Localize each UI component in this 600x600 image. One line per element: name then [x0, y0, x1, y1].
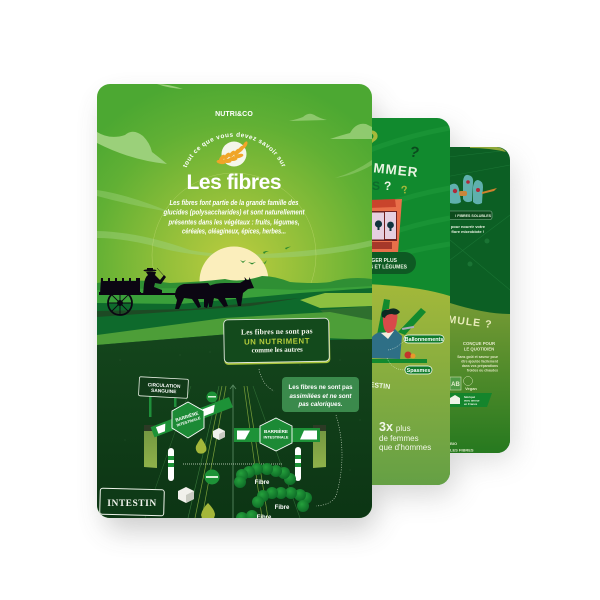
text: conçue pour le quotidien: CONÇUE POUR	[463, 341, 496, 346]
labels: fibre	[255, 480, 290, 521]
label: fibres solubles	[445, 211, 492, 220]
intro text: présentes dans les végétaux : fruits, légumes,	[168, 220, 300, 226]
back card: la formule	[450, 147, 510, 453]
front card: les fibres	[97, 84, 372, 518]
logo: bio: AB	[451, 382, 460, 388]
silhouette: ox cart and farmer	[99, 268, 254, 315]
icon: question marks: ?	[361, 125, 379, 158]
text: microbiote	[451, 226, 485, 233]
logo: bio	[450, 377, 461, 390]
sun	[200, 246, 268, 282]
heading: fibres	[372, 182, 391, 190]
barrier: open left: BARRIÈRE	[174, 409, 199, 423]
landscape fields	[97, 276, 372, 345]
text: conçue pour le quotidien: LE QUOTIDIEN	[464, 346, 494, 352]
illustration: man with bloating	[372, 299, 427, 363]
icon: sugar cube bottom	[178, 487, 194, 503]
text: footer	[450, 442, 474, 452]
heading: formule: ORMULE ?	[429, 311, 493, 331]
callout: not assimilated	[282, 377, 359, 412]
icon: wheat	[216, 141, 249, 166]
label: spasmes: Spasmes	[407, 368, 430, 374]
icon: question marks: ?	[408, 143, 421, 162]
text: microbiote: flore microbiote !	[451, 229, 484, 234]
sign: circulation sanguine: CIRCULATION	[148, 382, 181, 390]
callout connector	[259, 369, 342, 506]
pill: manger plus de fruits et légumes	[372, 252, 416, 274]
barrier: open left	[151, 397, 233, 438]
icon: lime drop top	[196, 438, 206, 454]
gate pillars	[144, 425, 326, 468]
text: microbiote: pour nourrir votre	[451, 224, 486, 229]
badge: fabriqué en France: en France	[464, 402, 478, 406]
stat: 3x plus de femmes: 3x plus	[379, 420, 411, 434]
dark ground	[97, 334, 372, 518]
card drop shadows	[105, 100, 513, 530]
callout: not a nutrient: UN NUTRIMENT	[244, 336, 310, 347]
text: footer: LES FIBRES	[450, 448, 474, 452]
logo: vegan: Vegan	[465, 386, 477, 391]
icon: glucose ball middle	[204, 470, 220, 484]
pill: manger plus de fruits et légumes: DE FRUITS ET LÉGUMES	[347, 262, 408, 270]
callout: not a nutrient: Les fibres ne sont pas	[241, 326, 313, 337]
barrier: closed right: BARRIÈRE	[264, 427, 288, 434]
heading: consommer: CONSOMMER	[318, 155, 419, 180]
heading: fibres: S	[372, 179, 380, 193]
sky wisps and clouds	[97, 84, 372, 258]
sign: circulation sanguine	[139, 377, 188, 417]
intro text: céréales, oléagineux, épices, herbes...	[182, 228, 286, 236]
stat: 3x plus de femmes: que d'hommes	[379, 443, 431, 452]
callout: not a nutrient	[224, 318, 330, 365]
posts	[168, 447, 301, 481]
icon: question marks: ?	[400, 184, 409, 197]
labels: fibre: Fibre	[275, 505, 290, 511]
fibre chains	[234, 463, 312, 524]
middle card: consommer	[372, 118, 450, 485]
badge: fabriqué en France: avec amour	[464, 398, 480, 402]
label: spasmes	[405, 366, 432, 374]
label: intestin	[100, 488, 164, 516]
text: description: dans vos préparations	[462, 364, 498, 368]
icon: question marks	[372, 130, 419, 194]
pill: manger plus de fruits et légumes: MANGER PLUS	[360, 258, 398, 264]
icon: sugar cube top	[213, 428, 225, 440]
icon: lime drop bottom	[201, 503, 215, 518]
icon: worm characters	[450, 175, 497, 204]
intro text: Les fibres font partie de la grande famille des	[170, 200, 299, 207]
barrier: open left: INTESTINALE	[176, 416, 202, 428]
heading: fibres: ?	[384, 179, 391, 193]
barrier: closed right: INTESTINALE	[264, 436, 289, 440]
text: description	[457, 355, 499, 372]
callout: not assimilated: pas caloriques.	[298, 401, 343, 408]
arched subtitle: tout ce que vous devez savoir sur	[183, 132, 286, 168]
heading: intestin: INTESTIN	[358, 381, 391, 391]
icon: slot machine	[372, 199, 402, 252]
logo: vegan	[464, 376, 477, 391]
birds	[240, 246, 291, 264]
text: description: Sans goût et saveur pour	[457, 355, 499, 359]
logo: Nutri&Co: NUTRI&CO	[215, 111, 253, 118]
callout: not a nutrient: comme les autres	[251, 346, 303, 354]
intro text	[163, 200, 305, 236]
label: fibres solubles: I FIBRES SOLUBLES	[455, 214, 492, 218]
labels: fibre: Fibre	[257, 515, 272, 521]
text: conçue pour le quotidien	[463, 342, 495, 352]
callout: not assimilated: Les fibres ne sont pas	[288, 384, 353, 391]
text: description: être ajoutée facilement	[461, 360, 499, 364]
title: Les fibres	[186, 171, 282, 194]
text: description: froides ou chaudes	[467, 368, 498, 372]
stat: 3x plus de femmes: de femmes	[379, 434, 419, 443]
label: ballonnements: Ballonnements	[405, 337, 443, 343]
sign: circulation sanguine: SANGUINE	[151, 388, 177, 395]
road lines and central arrow	[145, 385, 300, 518]
icon: glucose ball top	[206, 392, 218, 402]
callout: not assimilated: assimilées et ne sont	[290, 393, 352, 400]
intro text: glucides (polysaccharides) et sont naturellement	[163, 210, 305, 216]
dotted line	[183, 464, 282, 465]
stat: 3x plus de femmes	[379, 420, 431, 452]
text: footer: BIO	[450, 441, 457, 446]
label: intestin: INTESTIN	[107, 499, 157, 509]
labels: fibre: Fibre	[255, 480, 270, 486]
barrier: closed right	[234, 418, 320, 451]
badge: fabriqué en France	[450, 393, 492, 407]
badge: fabriqué en France: fabriqué	[464, 395, 475, 399]
